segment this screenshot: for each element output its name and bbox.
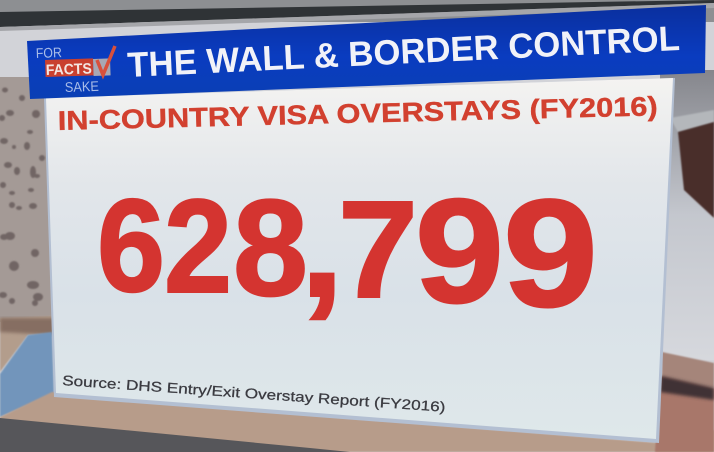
big number: 8: [233, 172, 308, 325]
source note: Source: DHS Entry/Exit Overstay Report (FY2016): [62, 372, 446, 415]
logo: For Facts Sake: FACTS: [46, 60, 92, 79]
rocky hillside: [0, 77, 56, 322]
title: THE WALL & BORDER CONTROL: [126, 19, 681, 85]
banner: blue title bar: [27, 5, 706, 99]
logo: For Facts Sake: [36, 44, 115, 95]
big number: 6: [97, 172, 165, 319]
logo: For Facts Sake: SAKE: [65, 78, 99, 95]
panel: white board: [44, 78, 675, 443]
big number: 2: [164, 173, 232, 321]
big number: 9: [415, 169, 504, 334]
icon: checkmark: [97, 46, 115, 75]
big number: 7: [338, 173, 418, 327]
big number: ,: [300, 160, 344, 328]
logo: For Facts Sake: FOR: [36, 44, 62, 61]
subheading: IN-COUNTRY VISA OVERSTAYS (FY2016): [57, 91, 658, 136]
big number: 9: [503, 168, 598, 339]
